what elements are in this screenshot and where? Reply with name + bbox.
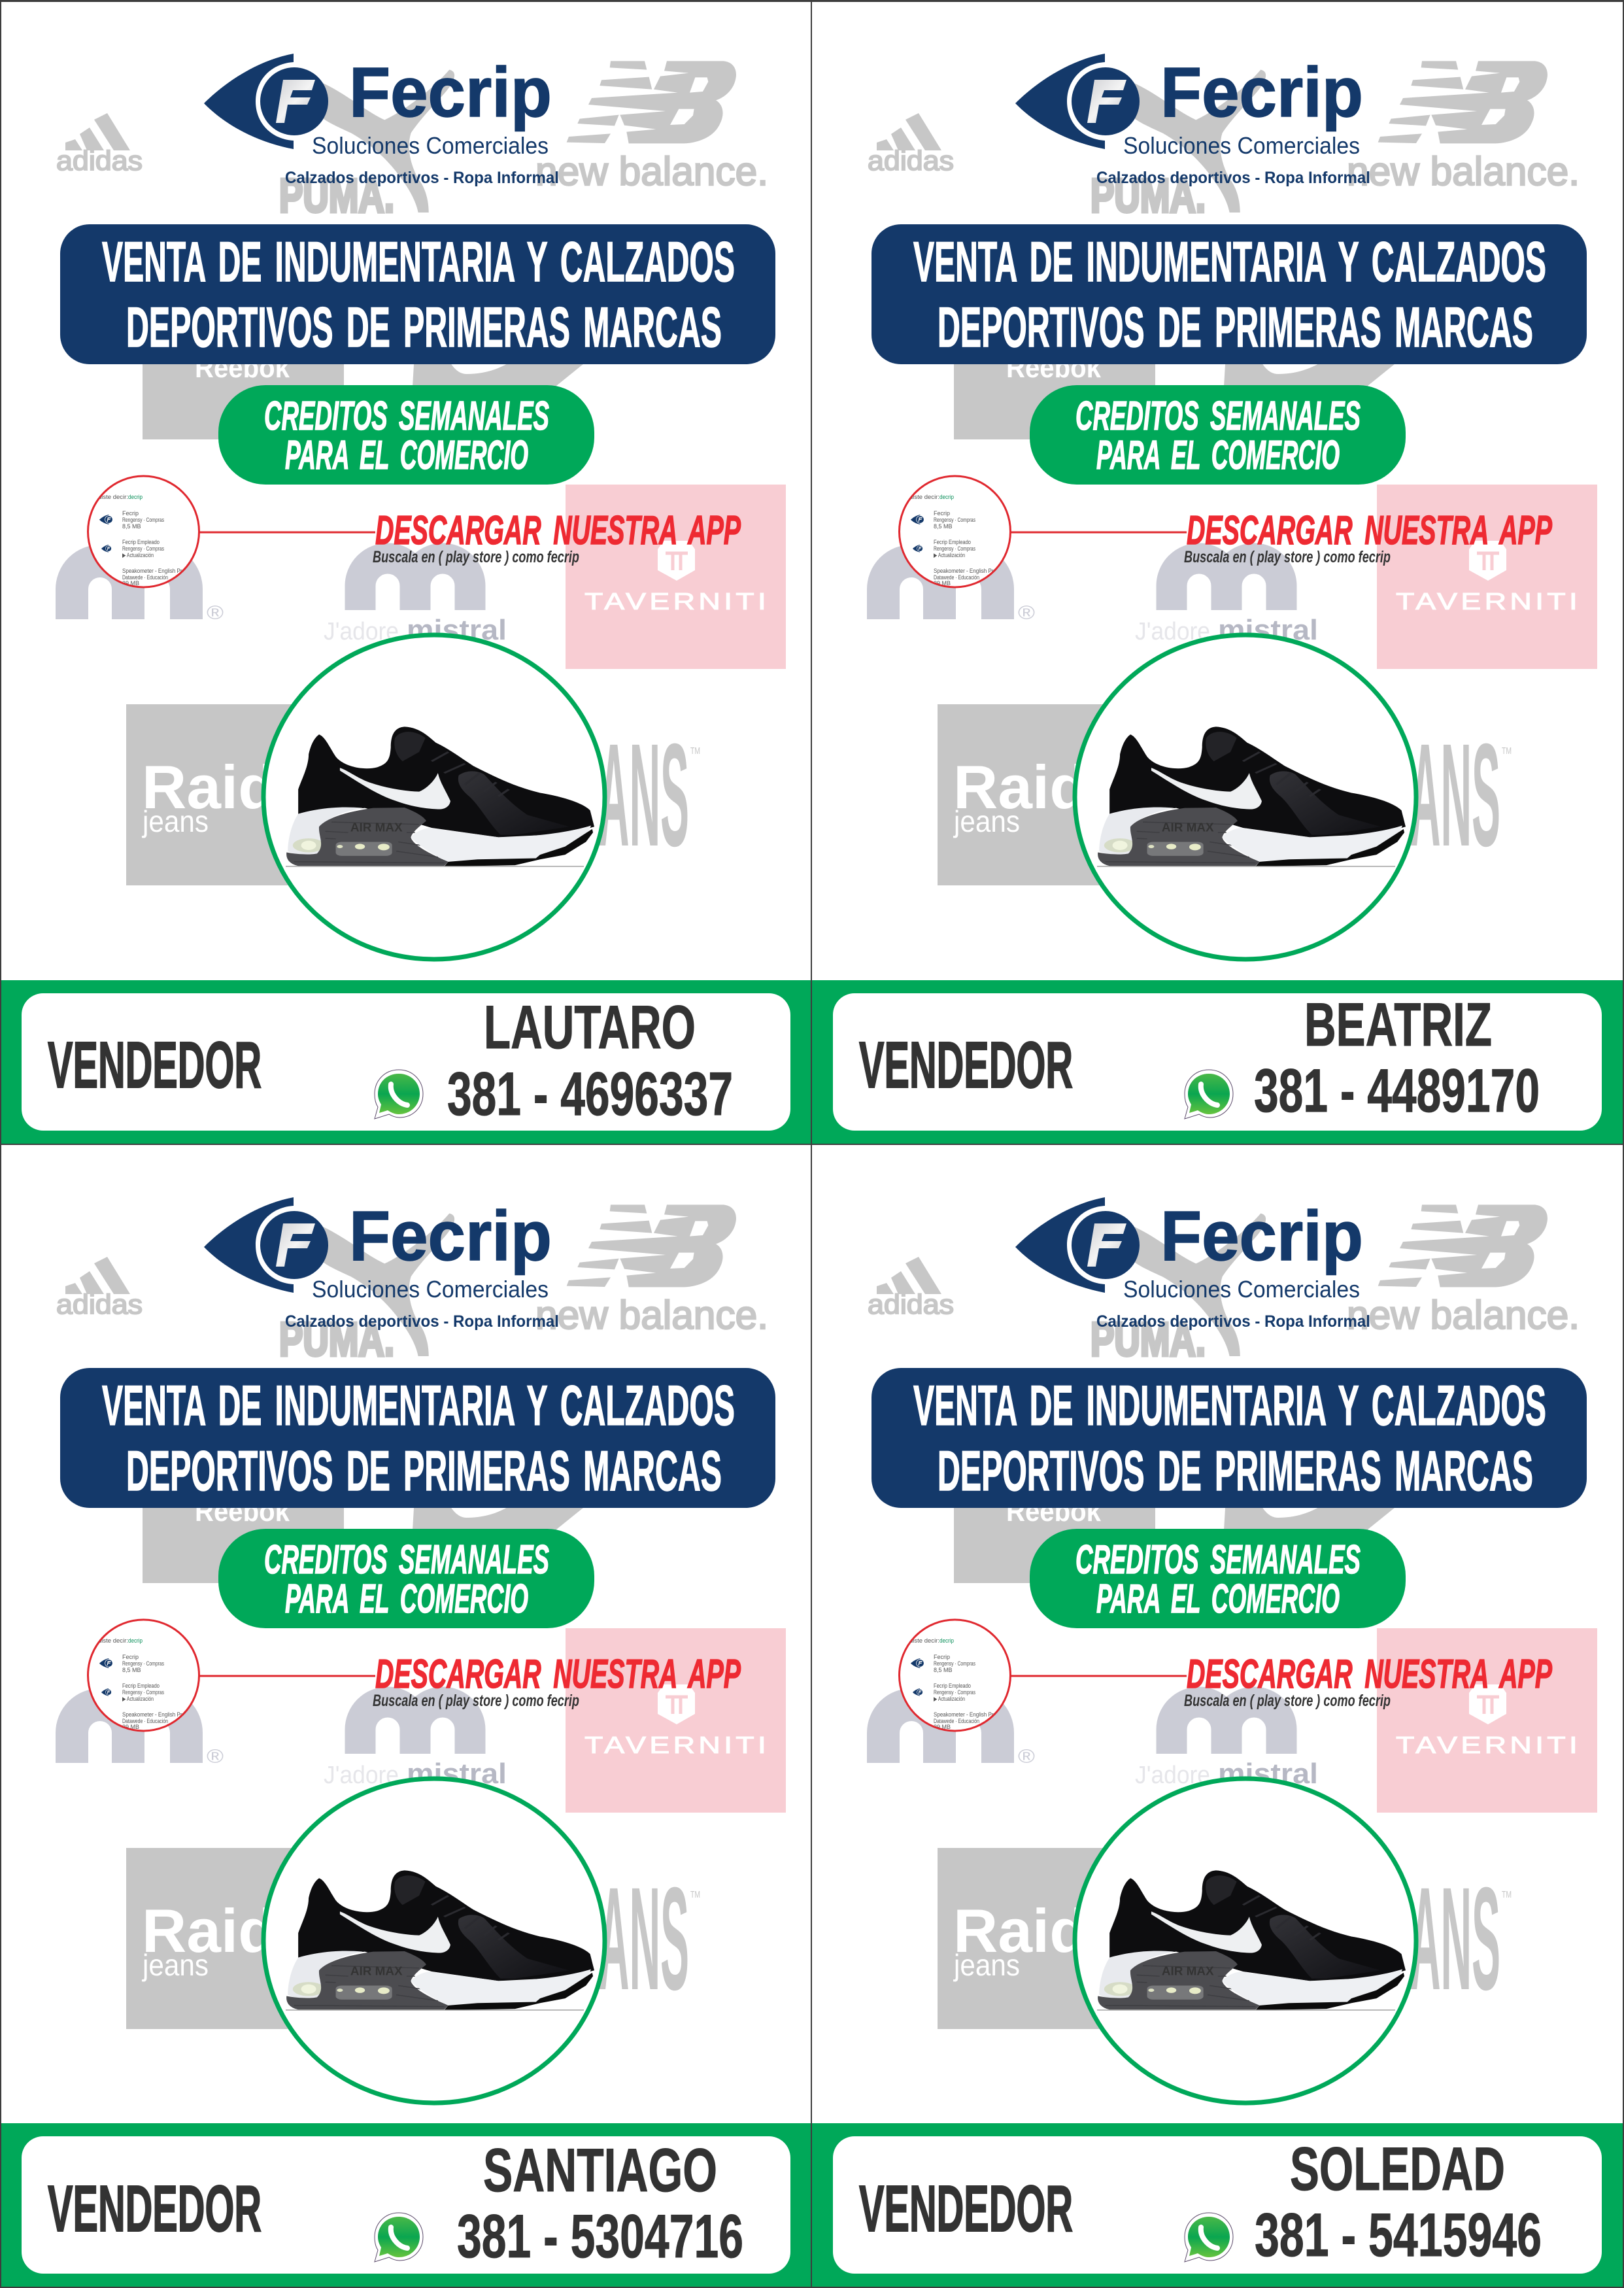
logo: adidas: adidas xyxy=(56,1289,143,1320)
logo: raid jeans xyxy=(126,704,296,885)
app screenshot circle: 29 MB xyxy=(122,580,139,587)
seller name: BEATRIZ xyxy=(1304,990,1492,1059)
whatsapp icon xyxy=(1185,2213,1233,2262)
seller label: VENDEDOR xyxy=(859,2172,1073,2245)
product circle xyxy=(263,1779,605,2103)
product circle xyxy=(1075,1779,1416,2103)
app screenshot circle: uiste decir: xyxy=(98,1637,128,1644)
logo: reebok xyxy=(143,1458,344,1583)
logo: raid jeans: Raid xyxy=(142,1896,276,1965)
app screenshot circle: decrip xyxy=(128,494,143,500)
app screenshot circle: Datawede · Educación xyxy=(934,1718,979,1724)
fecrip logo: Calzados deportivos - Ropa Informal xyxy=(1096,169,1370,187)
headline banner: DEPORTIVOS DE PRIMERAS MARCAS xyxy=(126,1440,722,1503)
fecrip logo: Calzados deportivos - Ropa Informal xyxy=(1096,1312,1370,1331)
logo: raid jeans xyxy=(938,704,1108,885)
logo: reebok: Reebok xyxy=(1006,1495,1101,1528)
seller band xyxy=(0,980,811,1144)
app screenshot circle: Fecrip Empleado xyxy=(934,539,971,545)
app search hint: Buscala en ( play store ) como fecrip xyxy=(373,548,579,566)
logo: raid jeans: Raid xyxy=(142,753,276,821)
app search hint: Buscala en ( play store ) como fecrip xyxy=(373,1692,579,1710)
app screenshot circle xyxy=(900,476,1011,587)
logo: puma xyxy=(279,70,454,222)
credit pill xyxy=(218,1529,594,1628)
app screenshot circle: ▶ Actualización xyxy=(934,552,965,558)
credit pill: CREDITOS SEMANALES xyxy=(1075,1537,1361,1582)
app screenshot circle: Datawede · Educación xyxy=(934,574,979,581)
logo: puma: PUMA. xyxy=(279,1314,394,1366)
panel: Lautaro xyxy=(0,52,811,1144)
app screenshot circle: uiste decir: xyxy=(909,1637,939,1644)
app screenshot circle: Fecrip xyxy=(934,1654,950,1660)
app screenshot circle: Fecrip xyxy=(934,510,950,517)
panel: Beatriz xyxy=(811,52,1624,1144)
logo: nike swoosh xyxy=(1221,353,1408,432)
fecrip logo: Calzados deportivos - Ropa Informal xyxy=(285,169,559,187)
logo: m mark: ® xyxy=(207,602,224,624)
app screenshot circle: ▶ Actualización xyxy=(934,1696,965,1702)
logo: taverniti xyxy=(566,485,786,669)
logo: reebok: Reebok xyxy=(195,352,290,384)
logo: raid jeans: jeans xyxy=(141,804,209,838)
logo: m mark xyxy=(883,560,1035,624)
app screenshot circle: 29 MB xyxy=(122,1724,139,1730)
app download heading: DESCARGAR NUESTRA APP xyxy=(375,508,741,553)
logo: mistral: mistral xyxy=(1218,1758,1318,1790)
product: shoe xyxy=(286,726,594,866)
logo: nike swoosh xyxy=(410,353,597,432)
fecrip logo: Fecrip xyxy=(1160,1196,1363,1275)
logo: new balance: new balance. xyxy=(535,1293,768,1337)
fecrip logo: Fecrip xyxy=(1160,52,1363,131)
logo: new balance xyxy=(535,61,768,194)
logo: nike swoosh xyxy=(1221,1497,1408,1575)
seller label: VENDEDOR xyxy=(48,1029,262,1102)
credit pill: CREDITOS SEMANALES xyxy=(264,1537,549,1582)
logo: new balance: new balance. xyxy=(535,149,768,194)
credit pill: CREDITOS SEMANALES xyxy=(264,394,549,439)
app screenshot circle: Fecrip Empleado xyxy=(122,539,160,545)
app screenshot circle: decrip xyxy=(128,1637,143,1644)
logo: adidas: adidas xyxy=(868,145,954,176)
logo: jeans fragment xyxy=(598,1857,700,2021)
logo: m mark xyxy=(883,1704,1035,1767)
logo: jeans fragment: TM xyxy=(1502,1889,1512,1900)
logo: jeans fragment: TM xyxy=(690,745,700,757)
logo: jeans fragment xyxy=(598,713,700,877)
app screenshot circle: Rengensy · Compras xyxy=(122,545,164,552)
app screenshot circle: Speakometer - English Pro xyxy=(122,568,185,574)
fecrip logo: Soluciones Comerciales xyxy=(1123,132,1360,159)
product: shoe xyxy=(286,1870,594,2010)
logo: puma: PUMA. xyxy=(1091,170,1206,222)
headline banner xyxy=(871,1368,1587,1508)
panel: Santiago: ANS xyxy=(598,1857,689,2021)
seller label: VENDEDOR xyxy=(859,1029,1073,1102)
logo: mistral: J'adore xyxy=(1135,618,1210,645)
logo: raid jeans: jeans xyxy=(141,1948,209,1982)
logo: adidas xyxy=(868,1257,954,1320)
logo: mistral: J'adore xyxy=(324,618,399,645)
logo: jeans fragment xyxy=(1410,713,1512,877)
app screenshot circle: ▶ Actualización xyxy=(122,1696,154,1702)
logo: mistral: mistral xyxy=(407,614,507,646)
app screenshot circle: Fecrip Empleado xyxy=(122,1682,160,1689)
logo: new balance xyxy=(1347,1204,1580,1337)
credit pill: CREDITOS SEMANALES xyxy=(1075,394,1361,439)
logo: nike swoosh xyxy=(410,1497,597,1575)
app screenshot circle: Datawede · Educación xyxy=(122,574,168,581)
seller band xyxy=(0,2123,811,2288)
app screenshot circle: 8,5 MB xyxy=(122,523,141,530)
logo: taverniti: TAVERNITI xyxy=(1396,1732,1581,1758)
app screenshot circle xyxy=(88,1620,199,1731)
credit pill xyxy=(218,385,594,485)
logo: puma: PUMA. xyxy=(279,170,394,222)
logo: m mark: ® xyxy=(207,1746,224,1767)
seller name: SOLEDAD xyxy=(1290,2134,1505,2203)
headline banner xyxy=(60,224,775,364)
logo: raid jeans: Raid xyxy=(953,1896,1087,1965)
seller name: SANTIAGO xyxy=(483,2136,717,2204)
logo: raid jeans: jeans xyxy=(953,804,1020,838)
headline banner xyxy=(60,1368,775,1508)
logo: reebok: Reebok xyxy=(195,1495,290,1528)
logo: mistral xyxy=(324,558,507,646)
headline banner: VENTA DE INDUMENTARIA Y CALZADOS xyxy=(102,1375,735,1437)
logo: m mark xyxy=(72,1704,224,1767)
fecrip logo: Calzados deportivos - Ropa Informal xyxy=(285,1312,559,1331)
logo: puma xyxy=(1091,70,1266,222)
app screenshot circle: Rengensy · Compras xyxy=(122,1689,164,1696)
headline banner: VENTA DE INDUMENTARIA Y CALZADOS xyxy=(102,231,735,294)
logo: reebok xyxy=(143,314,344,439)
fecrip logo xyxy=(204,52,559,187)
app download heading: DESCARGAR NUESTRA APP xyxy=(375,1652,741,1697)
app screenshot circle: 8,5 MB xyxy=(934,523,953,530)
logo: mistral: J'adore xyxy=(1135,1762,1210,1789)
logo: raid jeans: Raid xyxy=(953,753,1087,821)
logo: mistral: mistral xyxy=(407,1758,507,1790)
logo: jeans fragment: TM xyxy=(1502,745,1512,757)
logo: adidas: adidas xyxy=(56,145,143,176)
logo: taverniti: TAVERNITI xyxy=(1396,588,1581,615)
logo: taverniti xyxy=(566,1628,786,1813)
product circle xyxy=(263,635,605,959)
connector line xyxy=(199,1675,375,1677)
fecrip logo: Soluciones Comerciales xyxy=(1123,1276,1360,1303)
logo: adidas xyxy=(56,1257,143,1320)
logo: reebok: Reebok xyxy=(1006,352,1101,384)
logo: taverniti xyxy=(1377,1628,1597,1813)
app screenshot circle: 8,5 MB xyxy=(934,1667,953,1673)
seller band xyxy=(811,980,1624,1144)
whatsapp icon xyxy=(375,2213,423,2262)
connector line xyxy=(199,531,375,534)
app search hint: Buscala en ( play store ) como fecrip xyxy=(1184,1692,1391,1710)
logo: reebok xyxy=(954,314,1155,439)
app screenshot circle: uiste decir: xyxy=(98,494,128,500)
credit pill xyxy=(1030,385,1406,485)
app screenshot circle: Rengensy · Compras xyxy=(934,545,975,552)
app screenshot circle: Fecrip xyxy=(122,1654,139,1660)
fecrip logo xyxy=(204,1196,559,1331)
logo: mistral xyxy=(1135,558,1318,646)
logo: m mark: ® xyxy=(1018,602,1035,624)
panel: Lautaro: ANS xyxy=(598,713,689,877)
logo: mistral: J'adore xyxy=(324,1762,399,1789)
app screenshot circle: ▶ Actualización xyxy=(122,552,154,558)
logo: puma: PUMA. xyxy=(1091,1314,1206,1366)
fecrip logo xyxy=(1015,1196,1370,1331)
logo: new balance xyxy=(535,1204,768,1337)
app screenshot circle: 8,5 MB xyxy=(122,1667,141,1673)
app screenshot circle: Speakometer - English Pro xyxy=(122,1711,185,1718)
app screenshot circle: Fecrip Empleado xyxy=(934,1682,971,1689)
fecrip logo: Soluciones Comerciales xyxy=(312,1276,549,1303)
logo: jeans fragment xyxy=(1410,1857,1512,2021)
app screenshot circle: Speakometer - English Pro xyxy=(934,568,996,574)
logo: mistral xyxy=(1135,1702,1318,1790)
connector line xyxy=(1011,531,1187,534)
headline banner xyxy=(871,224,1587,364)
seller name: LAUTARO xyxy=(484,993,696,1061)
fecrip logo: Fecrip xyxy=(349,1196,552,1275)
app screenshot circle: Rengensy · Compras xyxy=(122,1660,164,1667)
logo: raid jeans: jeans xyxy=(953,1948,1020,1982)
logo: puma xyxy=(1091,1214,1266,1366)
logo: new balance: new balance. xyxy=(1347,149,1580,194)
logo: reebok xyxy=(954,1458,1155,1583)
panel: Santiago xyxy=(0,1196,811,2288)
app screenshot circle: Rengensy · Compras xyxy=(934,517,975,523)
seller band xyxy=(811,2123,1624,2288)
logo: raid jeans xyxy=(126,1848,296,2029)
app screenshot circle: Speakometer - English Pro xyxy=(934,1711,996,1718)
logo: mistral: mistral xyxy=(1218,614,1318,646)
app search hint: Buscala en ( play store ) como fecrip xyxy=(1184,548,1391,566)
logo: taverniti xyxy=(1377,485,1597,669)
app screenshot circle: uiste decir: xyxy=(909,494,939,500)
seller phone: 381 - 4696337 xyxy=(447,1059,733,1128)
app screenshot circle: decrip xyxy=(939,1637,954,1644)
logo: adidas: adidas xyxy=(868,1289,954,1320)
credit pill xyxy=(1030,1529,1406,1628)
app screenshot circle: decrip xyxy=(939,494,954,500)
app screenshot circle xyxy=(88,476,199,587)
fecrip logo: Fecrip xyxy=(349,52,552,131)
logo: m mark xyxy=(72,560,224,624)
app screenshot circle: Rengensy · Compras xyxy=(934,1689,975,1696)
app screenshot circle: 29 MB xyxy=(934,580,951,587)
logo: new balance xyxy=(1347,61,1580,194)
logo: taverniti: TAVERNITI xyxy=(584,1732,770,1758)
connector line xyxy=(1011,1675,1187,1677)
whatsapp icon xyxy=(1185,1070,1233,1119)
fecrip logo: Soluciones Comerciales xyxy=(312,132,549,159)
product: shoe xyxy=(1097,1870,1406,2010)
logo: mistral xyxy=(324,1702,507,1790)
credit pill: PARA EL COMERCIO xyxy=(1096,433,1340,478)
app screenshot circle: Rengensy · Compras xyxy=(122,517,164,523)
product: shoe xyxy=(1097,726,1406,866)
fecrip logo xyxy=(1015,52,1370,187)
app screenshot circle: Rengensy · Compras xyxy=(934,1660,975,1667)
app screenshot circle: 29 MB xyxy=(934,1724,951,1730)
logo: jeans fragment: TM xyxy=(690,1889,700,1900)
panel: Soledad xyxy=(811,1196,1624,2288)
logo: new balance: new balance. xyxy=(1347,1293,1580,1337)
logo: adidas xyxy=(868,113,954,176)
credit pill: PARA EL COMERCIO xyxy=(285,1577,528,1622)
app screenshot circle: Datawede · Educación xyxy=(122,1718,168,1724)
seller phone: 381 - 5304716 xyxy=(457,2202,743,2270)
product circle xyxy=(1075,635,1416,959)
app screenshot circle: Fecrip xyxy=(122,510,139,517)
logo: m mark: ® xyxy=(1018,1746,1035,1767)
logo: adidas xyxy=(56,113,143,176)
credit pill: PARA EL COMERCIO xyxy=(285,433,528,478)
headline banner: DEPORTIVOS DE PRIMERAS MARCAS xyxy=(126,296,722,359)
logo: puma xyxy=(279,1214,454,1366)
whatsapp icon xyxy=(375,1070,423,1119)
logo: taverniti: TAVERNITI xyxy=(584,588,770,615)
seller label: VENDEDOR xyxy=(48,2172,262,2245)
app screenshot circle xyxy=(900,1620,1011,1731)
logo: raid jeans xyxy=(938,1848,1108,2029)
credit pill: PARA EL COMERCIO xyxy=(1096,1577,1340,1622)
